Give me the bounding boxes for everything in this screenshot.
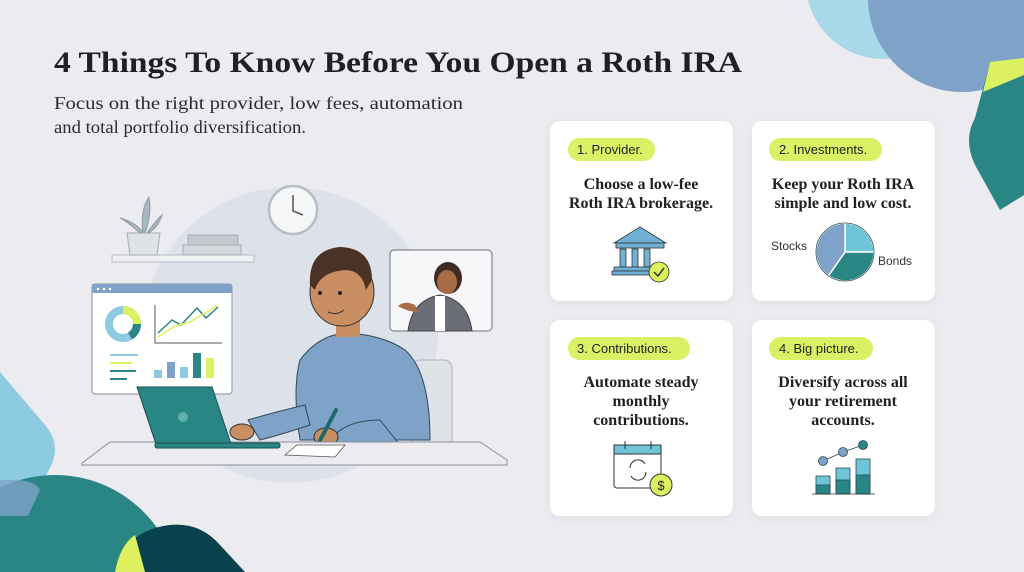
card 3: contributions [550, 320, 733, 516]
heading 1: Choose a low-fee [584, 176, 698, 193]
pill 4: 4. Big picture. [779, 341, 858, 356]
card 2: investments [752, 121, 935, 301]
chart: pie: Bonds [878, 254, 912, 268]
card 4: big picture [752, 320, 935, 516]
pill 2: 2. Investments. [779, 142, 867, 157]
desk [82, 442, 507, 465]
title: 4 Things To Know Before You Open a Roth IRA [54, 46, 742, 79]
pill 3: 3. Contributions. [577, 341, 672, 356]
heading 3: Automate steady [583, 374, 699, 391]
pill 1 [568, 138, 655, 161]
chart: pie: Stocks [771, 239, 807, 253]
heading 3 [583, 374, 699, 429]
icon: calendar: $ [657, 478, 665, 493]
subtitle: and total portfolio diversification. [54, 117, 306, 137]
heading 4: Diversify across all [778, 374, 908, 391]
heading 2 [772, 176, 915, 212]
laptop [137, 387, 280, 448]
pill 1: 1. Provider. [577, 142, 643, 157]
heading 2: Keep your Roth IRA [772, 176, 915, 193]
icon: bank [612, 227, 669, 282]
pill 2 [769, 138, 882, 161]
chair [412, 360, 452, 450]
chart: pie [771, 223, 912, 281]
video call window [390, 250, 492, 331]
heading 3: contributions. [593, 412, 689, 429]
clock [269, 186, 317, 234]
icon: calendar [614, 441, 672, 496]
heading 1: Roth IRA brokerage. [569, 195, 713, 212]
icon: growth bars [812, 440, 875, 494]
person [230, 247, 430, 450]
decor: top right shapes [806, 0, 1024, 210]
heading 4: accounts. [811, 412, 875, 429]
decor: bottom left shapes [0, 372, 245, 572]
shelf with plant and books [112, 197, 254, 262]
illustration: person at desk [82, 186, 507, 483]
pill 4 [769, 337, 873, 360]
heading 4 [778, 374, 908, 429]
heading 2: simple and low cost. [775, 195, 911, 212]
heading 4: your retirement [789, 393, 898, 410]
dashboard window [92, 284, 232, 394]
card 1: provider [550, 121, 733, 301]
heading 1 [569, 176, 713, 212]
pill 3 [568, 337, 690, 360]
subtitle [54, 93, 463, 137]
heading 3: monthly [613, 393, 669, 410]
subtitle: Focus on the right provider, low fees, automation [54, 93, 463, 113]
